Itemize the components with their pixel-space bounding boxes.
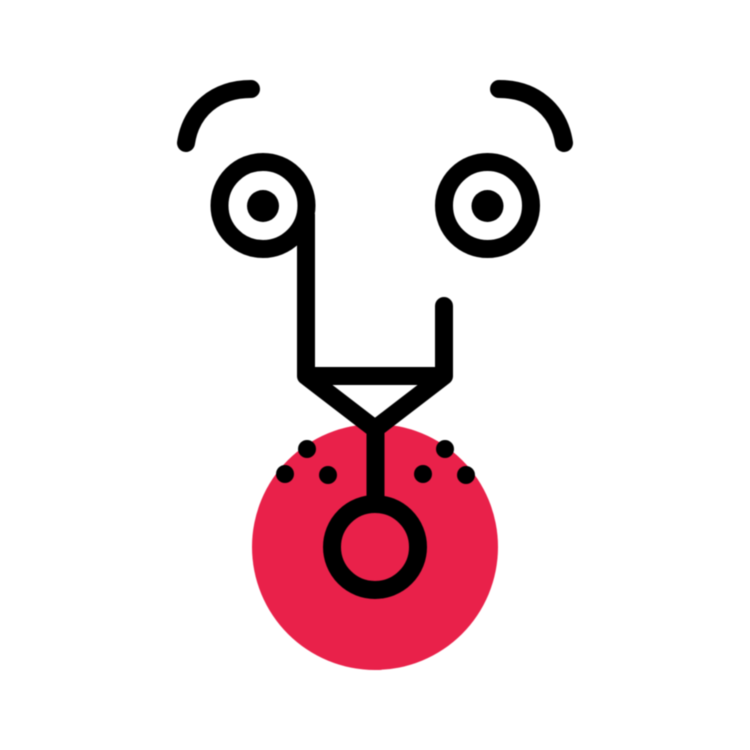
left pupil bbox=[247, 190, 279, 222]
right eyebrow bbox=[499, 89, 564, 143]
left eyebrow bbox=[186, 89, 251, 143]
philtrum line bbox=[366, 425, 384, 505]
left whisker dots bbox=[276, 440, 337, 484]
right whisker dots bbox=[414, 440, 475, 484]
left eye ring bbox=[220, 162, 306, 249]
mouth ring bbox=[332, 504, 418, 590]
right pupil bbox=[472, 190, 504, 222]
right eye ring bbox=[444, 162, 531, 249]
nose outline bbox=[306, 214, 444, 429]
red circle: muzzle bbox=[252, 424, 498, 670]
